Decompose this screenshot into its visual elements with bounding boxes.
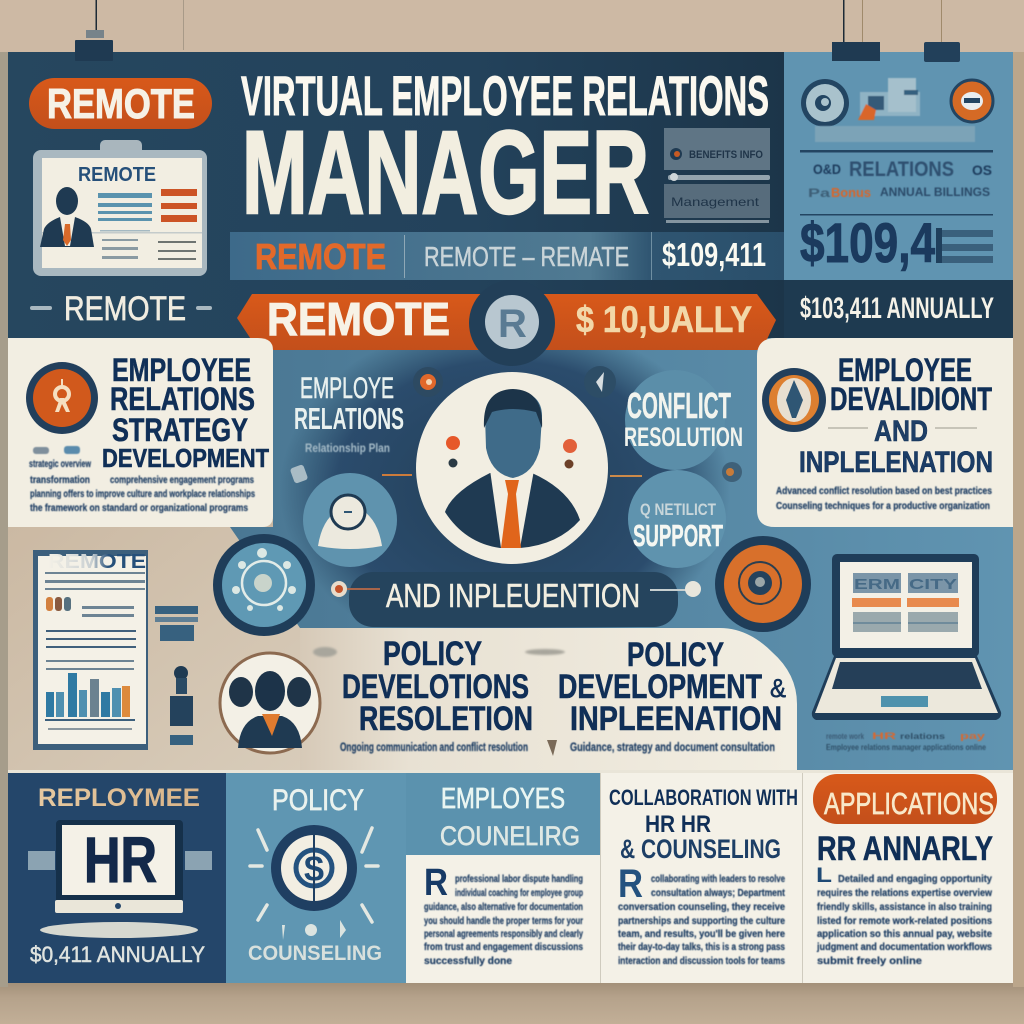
icon: orange award badge: [26, 362, 98, 434]
manager shirt: [490, 470, 534, 548]
policy body right: Guidance, strategy and document consultation: [570, 740, 775, 754]
badge: remote pill: REMOTE: [47, 80, 195, 127]
panel: collaboration with HR: [600, 773, 802, 983]
panel: center blue background: [230, 338, 1013, 770]
large manager circle: [416, 372, 608, 564]
blurred label text: RELATIONS: [849, 158, 954, 181]
heading: RELATIONS: [110, 381, 255, 417]
caption under laptop: relations: [900, 732, 946, 741]
body text: the framework on standard or organizational programs: [30, 503, 248, 514]
bubble: support: Q NETILICT: [640, 500, 716, 519]
drop cap: L: [816, 864, 832, 887]
body text: their day-to-day talks, this is a strong pass: [618, 942, 785, 953]
bubble: support: SUPPORT: [633, 518, 723, 553]
heading: EMPLOYEE: [112, 352, 251, 388]
hanging clip left: [75, 0, 184, 61]
panel: employee counseling: EMPLOYES: [441, 783, 565, 815]
strip: remote and salary: REMOTE: [255, 236, 386, 277]
icon: bottle: [170, 666, 193, 745]
report lines: [45, 572, 145, 670]
title: MANAGER: [242, 107, 649, 239]
policy development resolution heading: RESOLETION: [359, 700, 533, 738]
body text: comprehensive engagement programs: [110, 475, 254, 486]
heading: [799, 352, 993, 479]
card orange lines: [161, 189, 197, 222]
picture: workplace illustration: [815, 78, 975, 142]
icon: right round emblem: [951, 80, 993, 122]
policy development resolution heading: [342, 635, 533, 738]
blurred label text: O&D: [813, 161, 841, 177]
small compass icon: [584, 366, 616, 398]
body text: interaction and discussion tools for teams: [618, 956, 785, 967]
panel: policy target: COUNSELING: [248, 942, 382, 965]
body text: individual coaching for employee group: [455, 888, 583, 899]
bubble: support: [628, 470, 726, 568]
body text: Advanced conflict resolution based on best practices: [776, 486, 992, 497]
body text: from trust and engagement discussions: [424, 942, 583, 953]
policy body left: Ongoing communication and conflict resolution: [340, 740, 528, 754]
body text: listed for remote work-related positions: [817, 916, 992, 927]
report title: REMOTE: [48, 551, 146, 573]
blurred label text: ANNUAL BILLINGS: [880, 185, 990, 199]
icon: monitor: HR: [84, 824, 157, 896]
connector left: [382, 474, 412, 476]
panel: collaboration with HR: HR HR: [645, 811, 711, 838]
panel: policy target: POLICY: [272, 784, 364, 817]
body text: Counseling techniques for a productive organization: [776, 501, 990, 512]
icon: left round emblem: [801, 79, 849, 127]
left wall edge: [0, 52, 8, 987]
panel: top right blue: [784, 52, 1013, 280]
card grey lines: [102, 239, 196, 260]
blurred label text: [808, 158, 992, 200]
panel: HR computer: REPLOYMEE: [38, 784, 200, 812]
body text: partnerships and supporting the culture: [618, 916, 785, 927]
dots right: [563, 439, 577, 468]
body text: [816, 874, 992, 967]
heading: [102, 352, 269, 473]
panel: small grey info block: [664, 128, 770, 223]
panel: collaboration with HR: & COUNSELING: [620, 834, 781, 864]
manager tie: [501, 480, 521, 548]
banner: orange remote ribbon: [237, 280, 776, 366]
manager suit: [445, 473, 580, 548]
icon: orange gear circle: [715, 536, 811, 632]
connector right: [610, 475, 642, 477]
hanging clips right: [832, 0, 960, 62]
laptop screen content: CITY: [909, 576, 957, 593]
drop cap: R: [424, 862, 448, 904]
annual label: $0,411 ANNUALLY: [30, 942, 205, 967]
body text: you should handle the proper terms for your: [424, 916, 583, 927]
side details: [28, 851, 212, 870]
panel: lower left beige: [8, 527, 308, 770]
panel: small grey info block: BENEFITS INFO: [689, 149, 763, 161]
card: employee relations strategy development: [8, 338, 273, 527]
report mini chart: [46, 597, 71, 611]
heading: DEVELOPMENT: [102, 443, 269, 473]
policy development implementation heading: &: [770, 673, 786, 703]
manager hair: [484, 389, 542, 428]
laptop keyboard: [832, 662, 982, 689]
policy development resolution heading: DEVELOTIONS: [342, 668, 529, 706]
bubble: conflict resolution: CONFLICT: [627, 385, 731, 426]
body text: requires the relations expertise overview: [817, 888, 992, 899]
small label: strategic overview: [29, 459, 91, 470]
card blue lines: [98, 193, 152, 232]
laptop base: [812, 656, 1001, 720]
body text: consultation always; Department: [651, 888, 786, 899]
panel: employee counseling: COUNELIRG: [440, 821, 580, 851]
panel: top header band: [8, 52, 1013, 338]
body text: team, and results, you'll be given here: [618, 929, 785, 940]
panel: collaboration with HR: COLLABORATION WITH: [609, 785, 798, 810]
banner: and implementation: [331, 572, 701, 627]
panel: applications: [802, 773, 1013, 983]
body text: guidance, also alternative for documentation: [424, 902, 583, 913]
body text: personal agreements responsibly and clearly: [424, 929, 583, 940]
icon: R medallion: [469, 280, 555, 366]
icon: keyboard: [40, 922, 198, 938]
banner: and implementation: AND INPLEUENTION: [386, 577, 640, 614]
policy development implementation heading: DEVELOPMENT: [558, 668, 762, 706]
body text: submit freely online: [817, 956, 922, 967]
grey flourishes: [828, 427, 977, 429]
icon: report document: [33, 550, 148, 750]
right wall edge: [1013, 52, 1024, 987]
body text: friendly skills, assistance in also training: [817, 902, 992, 913]
laptop screen content: [852, 573, 959, 632]
bubble: conflict resolution: RESOLUTION: [624, 422, 743, 452]
divider rule upper: [800, 150, 993, 152]
caption under laptop: [826, 731, 986, 752]
panel: center hub: [290, 366, 743, 568]
smudges: [313, 647, 565, 657]
strip: remote and salary: REMOTE – REMATE: [424, 241, 629, 272]
drop cap: R: [618, 862, 643, 906]
bubble: figure: [303, 473, 397, 567]
body text: [776, 486, 992, 512]
orange dot: [413, 367, 443, 397]
connector left: [340, 588, 380, 590]
card: employee development and implementation: [757, 338, 1013, 527]
blurred label text: Pa: [808, 186, 830, 200]
body text: [424, 874, 583, 967]
blurred label text: OS: [972, 162, 992, 178]
small label: [29, 446, 91, 470]
salary bars: [936, 228, 993, 263]
caption under laptop: pay: [960, 731, 985, 741]
badge: applications: [813, 774, 997, 824]
banner: orange remote ribbon: REMOTE: [267, 293, 450, 345]
panel: HR computer: [8, 773, 226, 983]
bar chart: [45, 673, 135, 730]
connector right: [650, 589, 690, 591]
strip: remote and salary: $109,411: [662, 236, 766, 273]
body text: [618, 874, 786, 967]
body text: application so this annual pay, website: [817, 929, 992, 940]
blurred label text: Bonus: [831, 185, 871, 200]
policy development implementation heading: [558, 636, 786, 738]
card person silhouette: [40, 187, 94, 247]
employee relations label: EMPLOYE: [300, 372, 394, 405]
small key icon: [290, 464, 308, 484]
employee relations label: Relationship Plan: [305, 441, 390, 455]
divider rule lower: [800, 214, 993, 216]
title: [241, 64, 769, 239]
body text: professional labor dispute handling: [455, 874, 583, 885]
panel: policy target: [226, 773, 406, 983]
heading: AND: [874, 415, 928, 448]
body text: judgment and documentation workflows: [816, 942, 992, 953]
salary figure: $109,4: [800, 211, 935, 274]
panel: policy card: [300, 628, 797, 770]
employee relations label: [294, 372, 404, 455]
body text: collaborating with leaders to resolve: [651, 874, 785, 885]
icon: monitor: [55, 820, 183, 913]
panel: employee counseling: [406, 773, 600, 983]
icon: R medallion: R: [498, 302, 527, 346]
body text: planning offers to improve culture and workplace relationships: [30, 489, 255, 500]
policy development resolution heading: POLICY: [383, 635, 482, 673]
bottom strip top edge: [8, 770, 1013, 773]
pin icon: [547, 740, 557, 756]
heading: STRATEGY: [112, 412, 248, 448]
caption under laptop: HR: [872, 731, 897, 741]
body text: [30, 475, 255, 514]
manager head: [485, 391, 542, 478]
policy development implementation heading: INPLEENATION: [570, 700, 782, 738]
icon: target: $: [304, 848, 324, 889]
caption under laptop: Employee relations manager applications online: [826, 743, 986, 752]
body text: transformation: [30, 475, 90, 486]
employee relations label: RELATIONS: [294, 401, 404, 436]
policy development implementation heading: POLICY: [627, 636, 724, 674]
laptop touchpad: [881, 696, 928, 707]
body text: conversation counseling, they receive: [618, 902, 785, 913]
banner: orange remote ribbon: $ 10,UALLY: [576, 299, 752, 340]
target rays: [250, 828, 378, 922]
small bottom icons: [282, 920, 346, 940]
heading: EMPLOYEE: [838, 352, 972, 388]
body text: Detailed and engaging opportunity: [838, 874, 992, 885]
body text: successfully done: [424, 956, 512, 967]
icon: ID card: [33, 140, 207, 276]
panel: small grey info block: Management: [671, 195, 760, 209]
icon: laptop: [812, 554, 1001, 720]
center dark backdrop: [280, 318, 730, 662]
dots left: [446, 436, 460, 468]
icon: orange shield badge: [762, 368, 826, 432]
caption under laptop: remote work: [826, 732, 864, 741]
laptop screen content: ERM: [854, 576, 900, 593]
label: remote with dashes: REMOTE: [64, 290, 186, 328]
strip: remote and salary: [230, 232, 784, 280]
icon: blue ornament circle: [213, 534, 315, 636]
icon: side tray: [155, 606, 198, 641]
bubble: conflict resolution: [624, 370, 743, 470]
icon: team circle: [220, 653, 320, 753]
card label: REMOTE: [78, 164, 156, 186]
icon: target: [271, 825, 357, 911]
small tool icon: [722, 462, 742, 482]
floor area below poster: [0, 983, 1024, 1024]
